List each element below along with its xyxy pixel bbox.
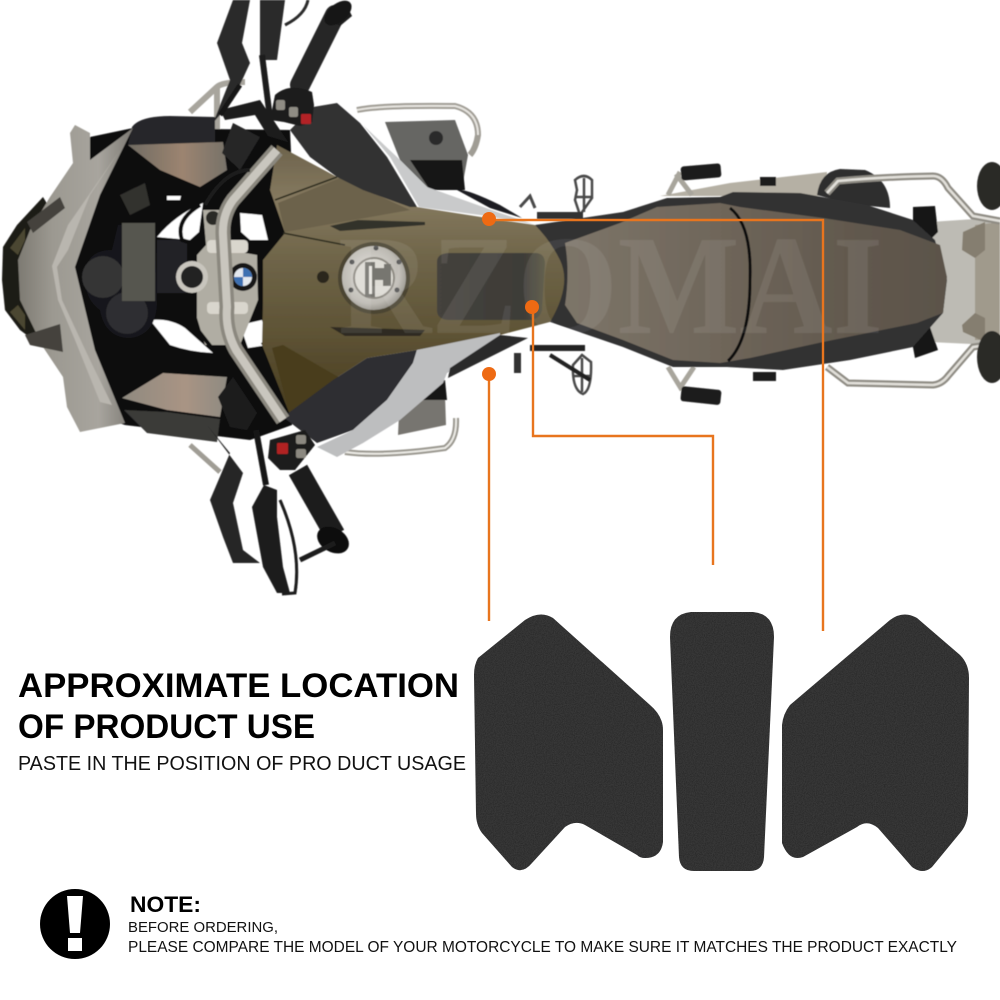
steering head and clamps (176, 205, 273, 365)
lower grip (298, 470, 335, 535)
heading: APPROXIMATE LOCATION (18, 667, 459, 705)
cockpit dark underlay (70, 128, 296, 440)
note block (128, 892, 957, 956)
subheading: PASTE IN THE POSITION OF PRO DUCT USAGE (18, 752, 466, 775)
note block: BEFORE ORDERING, (128, 919, 278, 936)
upper mirrors (213, 0, 308, 123)
foot pegs (514, 176, 592, 394)
windscreen fairing (2, 125, 133, 432)
black cable loops (180, 205, 273, 365)
upper tank crease (278, 178, 410, 232)
rear rack and exhaust (660, 162, 1000, 405)
lower mirrors (207, 425, 335, 594)
callout: centre tank pad marker line (525, 300, 713, 565)
tank (262, 145, 565, 415)
product: right pad (782, 614, 969, 871)
icon: exclamation (40, 889, 110, 959)
instrument cluster (82, 183, 187, 338)
heading (18, 667, 459, 746)
callout: lower tank pad marker line (482, 367, 496, 621)
handlebar (223, 0, 356, 559)
fuel cap (338, 242, 410, 314)
callout: upper tank pad marker line (482, 212, 823, 631)
note block: NOTE: (130, 892, 201, 917)
upper grip (300, 15, 335, 85)
upper white panel (363, 125, 533, 224)
lower black tank panel (283, 350, 417, 443)
heading: OF PRODUCT USE (18, 708, 315, 746)
lower white panel (317, 333, 500, 457)
product: left pad (474, 614, 663, 870)
seat (535, 192, 947, 370)
side panels (122, 116, 227, 442)
upper black tank panel (290, 103, 417, 207)
upper switch block (270, 88, 314, 126)
motorcycle top view (2, 0, 1000, 594)
note block: PLEASE COMPARE THE MODEL OF YOUR MOTORCYCLE TO MAKE SURE IT MATCHES THE PRODUCT EXACTLY (128, 939, 957, 956)
engine and crash bars (190, 82, 478, 472)
tank slots (330, 220, 425, 231)
white gaps in cockpit (150, 196, 268, 353)
tank pad placed (437, 253, 545, 320)
lower switch block (268, 430, 315, 470)
brake master cylinders (205, 100, 288, 430)
product: centre pad (670, 612, 774, 871)
watermark: RZOMAI (338, 206, 883, 364)
